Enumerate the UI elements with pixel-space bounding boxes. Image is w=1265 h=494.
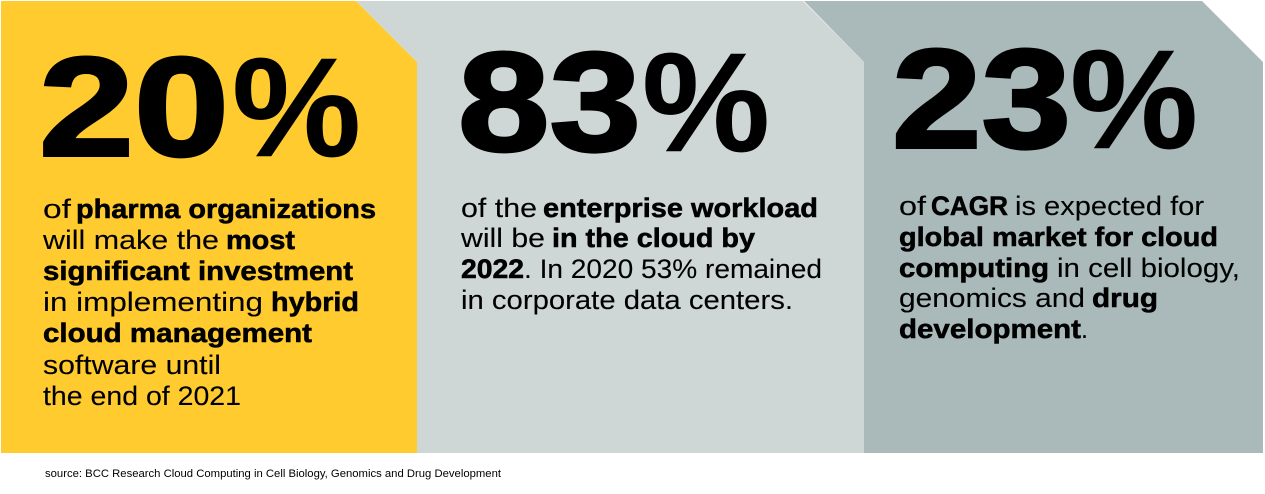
big number: 23%: 23 xyxy=(892,20,1071,178)
text block: pharma organizations description: will make the xyxy=(42,225,219,255)
text block: CAGR description: computing xyxy=(899,253,1049,283)
text block: pharma organizations description: in implementing xyxy=(43,287,263,317)
big number: 23% xyxy=(892,20,1198,178)
text block: enterprise workload description: will be xyxy=(460,223,545,253)
panel: 23% statistic xyxy=(892,20,1240,344)
source footnote: source: BCC Research Cloud Computing in Cell Biology, Genomics and Drug Development xyxy=(45,468,501,480)
big number: 20%: % xyxy=(232,28,361,186)
text block: pharma organizations description: hybrid xyxy=(271,287,359,317)
panel: 83% statistic xyxy=(458,22,822,315)
text block: enterprise workload description: of the xyxy=(461,193,537,223)
big number: 20%: 20 xyxy=(39,28,229,186)
text block: CAGR description: development xyxy=(899,314,1081,344)
text block: CAGR description: global market for cloud xyxy=(899,222,1218,252)
big number: 83%: % xyxy=(642,23,770,181)
text block: enterprise workload description: 2022 xyxy=(461,254,524,284)
panel: 23% background xyxy=(804,1,1263,453)
panel: 20% background xyxy=(1,1,417,453)
panel: 83% background xyxy=(356,1,864,453)
text block: enterprise workload description: in corporate data centers. xyxy=(461,285,793,315)
text block: pharma organizations description: most xyxy=(226,225,295,255)
text block: CAGR description: in cell biology, xyxy=(1057,253,1240,283)
text block: enterprise workload description xyxy=(460,193,822,315)
text block: CAGR description: genomics and xyxy=(899,283,1085,313)
big number: 83%: 83 xyxy=(458,22,641,180)
text block: CAGR description: is expected for xyxy=(1015,191,1204,221)
text block: pharma organizations description: significant investment xyxy=(43,256,353,286)
text block: CAGR description: drug xyxy=(1092,283,1158,313)
text block: enterprise workload description: . In 2020 53% remained xyxy=(524,254,822,284)
big number: 20% xyxy=(39,28,361,186)
text block: pharma organizations description: the end of 2021 xyxy=(43,381,241,411)
text block: pharma organizations description: cloud management xyxy=(43,318,312,348)
text block: CAGR description: CAGR xyxy=(931,191,1008,221)
text block: enterprise workload description: enterprise workload xyxy=(543,193,818,223)
text block: pharma organizations description: pharma organizations xyxy=(76,194,376,224)
text block: pharma organizations description: software until xyxy=(43,350,221,380)
text block: CAGR description: of xyxy=(899,191,927,221)
text block: pharma organizations description xyxy=(42,194,376,411)
text block: CAGR description xyxy=(899,191,1240,344)
big number: 23%: % xyxy=(1070,20,1198,178)
text block: pharma organizations description: of xyxy=(43,194,72,224)
big number: 83% xyxy=(458,22,770,181)
text block: enterprise workload description: in the cloud by xyxy=(552,223,755,253)
panel: 20% statistic xyxy=(39,28,376,411)
text block: CAGR description: . xyxy=(1081,314,1088,344)
